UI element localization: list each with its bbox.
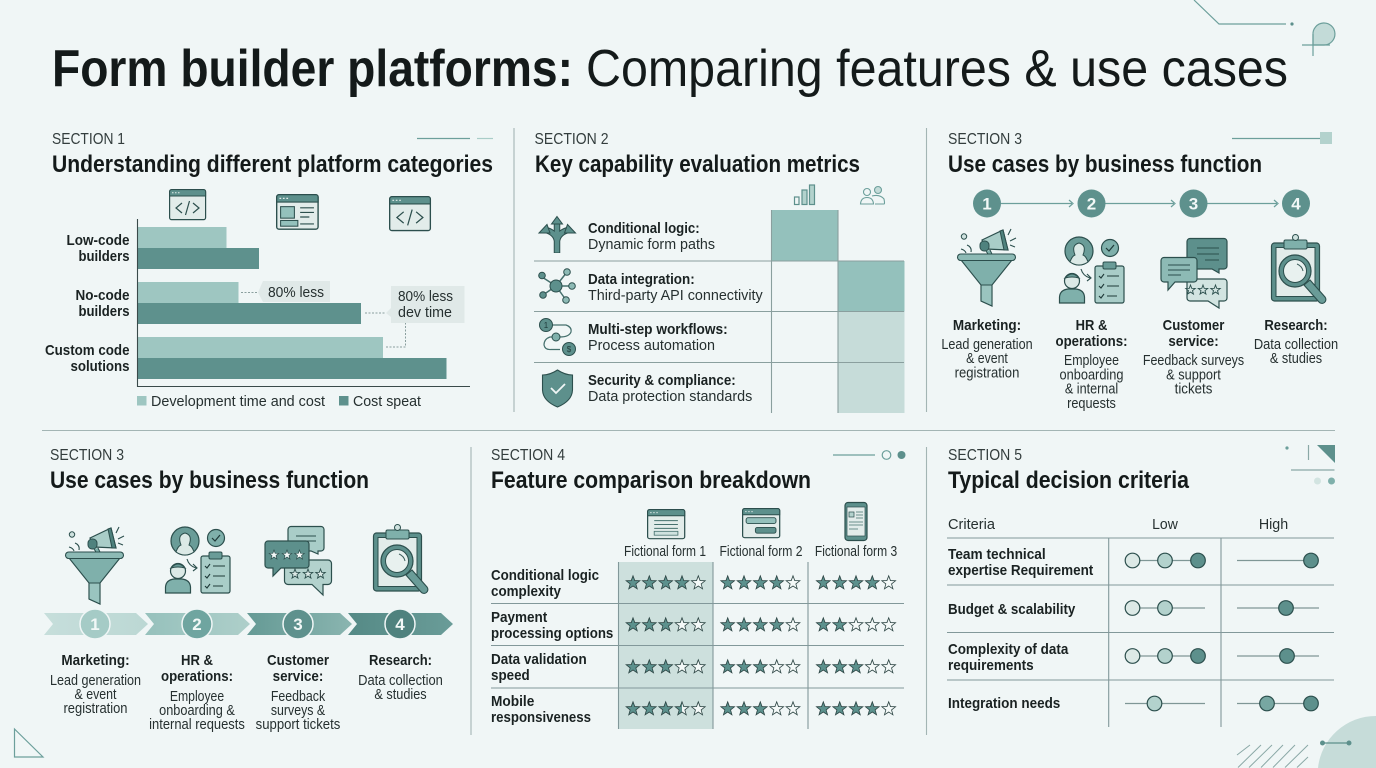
section label: SECTION 4 <box>491 447 565 464</box>
icon: form 2 window <box>743 509 780 538</box>
row labels: Conditional logic <box>491 567 599 584</box>
icon: security shield <box>542 370 572 407</box>
text: marketing: Lead generation <box>941 337 1033 353</box>
row: technical expertise <box>948 546 1318 579</box>
heading: Use cases by business function <box>948 151 1262 178</box>
row: technical expertise: Team technical <box>948 546 1046 563</box>
callout: 80% less <box>241 281 330 302</box>
icon: HR people and checklist <box>1060 237 1124 303</box>
numbered steps with arrows: 2 <box>1087 194 1096 214</box>
icon: form 1 window <box>648 510 685 539</box>
text: research: & studies <box>1270 351 1322 367</box>
table header: High <box>1259 517 1288 533</box>
row text: data integration: Data integration: <box>588 271 695 288</box>
text: customer service: Feedback <box>271 689 326 705</box>
bar chart: builders <box>78 248 130 265</box>
heading: Use cases by business function <box>50 467 369 494</box>
chevron process band: 4 <box>395 615 405 634</box>
panel: section 3 bottom use cases <box>44 447 453 733</box>
text: HR: internal requests <box>149 717 245 733</box>
panel: section 3 top use cases <box>941 131 1338 412</box>
icon: marketing funnel <box>958 229 1016 306</box>
text: customer service: tickets <box>1175 382 1212 398</box>
text: marketing: & event <box>966 351 1008 367</box>
text: marketing <box>50 652 141 717</box>
section label: SECTION 3 <box>948 131 1022 148</box>
row text: data integration <box>588 271 763 304</box>
chevron process band: 3 <box>293 615 303 634</box>
text: marketing: Lead generation <box>50 673 141 689</box>
text: customer service: Feedback surveys <box>1143 353 1244 369</box>
column headers: Fictional form 3 <box>815 544 897 560</box>
row text: security <box>588 372 752 405</box>
numbered steps with arrows: 1 <box>982 194 992 214</box>
row text: conditional logic: Conditional logic: <box>588 220 700 237</box>
text: customer service: Customer <box>267 652 329 669</box>
numbered steps with arrows: 4 <box>1291 194 1301 214</box>
text: customer service: & support <box>1166 368 1221 384</box>
text: customer service: service: <box>1168 333 1219 350</box>
text: research: & studies <box>374 687 427 703</box>
row: data complexity <box>948 641 1319 674</box>
title: Form builder platforms: <box>52 40 573 98</box>
legend: Cost speat <box>353 394 421 410</box>
icon: people <box>860 186 884 204</box>
text: HR <box>149 652 245 733</box>
text: HR <box>1056 317 1128 412</box>
bar chart: builders <box>78 303 130 320</box>
icon: HR people and checklist <box>166 527 230 593</box>
title subtitle part: Comparing features & use cases <box>586 40 1288 98</box>
heading: Typical decision criteria <box>948 467 1190 494</box>
decoration: top right line and pin <box>1194 0 1335 56</box>
text: HR: operations: <box>161 668 233 685</box>
text: customer service <box>256 652 340 733</box>
chevron process band: 2 <box>192 615 202 634</box>
text: research: Data collection <box>1254 337 1338 353</box>
bar chart <box>45 219 470 386</box>
panel: section 5 decision criteria <box>947 445 1335 727</box>
row labels: processing options <box>491 625 613 642</box>
text: research <box>358 652 443 703</box>
icon: workflow steps <box>540 318 576 356</box>
column headers: Fictional form 1 <box>624 544 706 560</box>
row text: conditional logic: Dynamic form paths <box>588 237 715 253</box>
metric grid <box>534 210 904 413</box>
text: HR: HR & <box>181 652 213 669</box>
row text: data integration: Third-party API connectivity <box>588 288 763 304</box>
text: customer service <box>1143 317 1244 398</box>
text: research <box>1254 317 1338 367</box>
row labels: Payment <box>491 609 547 626</box>
text: research: Research: <box>1264 317 1328 334</box>
row labels: responsiveness <box>491 709 591 726</box>
row text: security: Data protection standards <box>588 389 752 405</box>
text: marketing <box>941 317 1033 382</box>
row: data complexity: Complexity of data <box>948 641 1069 658</box>
row: data complexity: requirements <box>948 657 1034 674</box>
row text: workflows: Process automation <box>588 338 715 354</box>
bar chart: Low-code <box>66 232 130 249</box>
criteria table grid <box>947 538 1334 727</box>
legend <box>137 394 421 410</box>
icon: workflow steps: 1 <box>544 321 549 330</box>
numbered steps with arrows <box>973 190 1310 218</box>
star ratings: data validation <box>626 660 896 673</box>
table header <box>948 517 1288 533</box>
text: HR: Employee <box>1064 353 1119 369</box>
bar chart: No-code <box>76 287 130 304</box>
panel: section 2 capability metrics <box>534 131 904 413</box>
icon: marketing funnel <box>66 527 124 604</box>
row text: security: Security & compliance: <box>588 372 736 389</box>
row labels: Mobile <box>491 693 534 710</box>
text: marketing: registration <box>64 701 128 717</box>
heading: Understanding different platform categories <box>52 151 493 178</box>
icon: form 3 phone <box>845 502 867 540</box>
callout: 80% less: 80% less <box>268 285 324 301</box>
row labels: complexity <box>491 583 562 600</box>
legend: Development time and cost <box>151 394 325 410</box>
row labels: speed <box>491 667 530 684</box>
text: HR: onboarding & <box>159 703 235 719</box>
text: HR: HR & <box>1076 317 1107 334</box>
row labels <box>491 567 613 726</box>
star ratings: mobile responsiveness <box>626 702 896 715</box>
text: customer service: support tickets <box>256 717 340 733</box>
row text: conditional logic <box>588 220 715 253</box>
icon: code window dark <box>390 197 430 231</box>
row: budget <box>948 601 1319 618</box>
panel: section 1 platform categories <box>45 131 493 410</box>
callout: 80% less dev time: 80% less <box>398 289 453 305</box>
icon: integration network <box>539 269 575 303</box>
text: marketing: & event <box>74 687 116 703</box>
chevron process band <box>44 609 453 639</box>
icon: form layout window <box>277 195 318 229</box>
table header: Low <box>1152 517 1178 533</box>
row text: workflows: Multi-step workflows: <box>588 321 728 338</box>
table header: Criteria <box>948 517 996 533</box>
icon: research clipboard <box>1272 234 1326 303</box>
text: marketing: Marketing: <box>953 317 1021 334</box>
icon: research clipboard <box>374 524 428 593</box>
section label: SECTION 3 <box>50 447 124 464</box>
heading: Feature comparison breakdown <box>491 467 811 494</box>
text: HR: operations: <box>1056 333 1128 350</box>
text: marketing: Marketing: <box>61 652 130 669</box>
text: research: Data collection <box>358 673 443 689</box>
text: HR: requests <box>1067 396 1116 412</box>
text: HR: & internal <box>1065 382 1118 398</box>
row labels: Data validation <box>491 651 587 668</box>
numbered steps with arrows: 3 <box>1189 194 1198 214</box>
icon: workflow steps: $ <box>567 345 572 354</box>
callout: 80% less dev time <box>365 286 464 347</box>
section label: SECTION 1 <box>52 131 125 148</box>
star ratings: payment options <box>626 618 896 631</box>
star ratings: conditional logic <box>626 576 896 589</box>
bar chart: solutions <box>70 358 130 375</box>
row text: workflows <box>588 321 728 354</box>
icon: bar columns <box>794 185 814 204</box>
text: customer service: surveys & <box>271 703 325 719</box>
text: marketing: registration <box>955 366 1019 382</box>
column headers: Fictional form 2 <box>720 544 802 560</box>
icon: code window <box>170 190 206 220</box>
row: integration <box>948 695 1318 712</box>
text: customer service: Customer <box>1163 317 1224 334</box>
decoration: bottom right shapes <box>1237 716 1376 768</box>
decoration: corner triangle <box>14 729 43 757</box>
comparison table grid <box>491 562 904 729</box>
row: integration: Integration needs <box>948 695 1060 712</box>
text: research: Research: <box>369 652 432 669</box>
column headers <box>624 544 897 560</box>
panel: section 4 feature comparison <box>491 447 906 729</box>
chevron process band: 1 <box>90 615 100 634</box>
icon: branching arrows <box>539 216 576 253</box>
callout: 80% less dev time: dev time <box>398 305 452 321</box>
text: HR: onboarding <box>1060 368 1124 384</box>
icon: customer service star bubbles <box>265 526 332 595</box>
bar chart: Custom code <box>45 342 130 359</box>
row: technical expertise: expertise Requirement <box>948 562 1093 579</box>
text: HR: Employee <box>170 689 224 705</box>
text: customer service: service: <box>273 668 323 685</box>
section label: SECTION 5 <box>948 447 1022 464</box>
row: budget: Budget & scalability <box>948 601 1076 618</box>
heading: Key capability evaluation metrics <box>535 151 860 178</box>
section label: SECTION 2 <box>534 131 608 148</box>
icon: customer service bubbles <box>1161 238 1227 308</box>
